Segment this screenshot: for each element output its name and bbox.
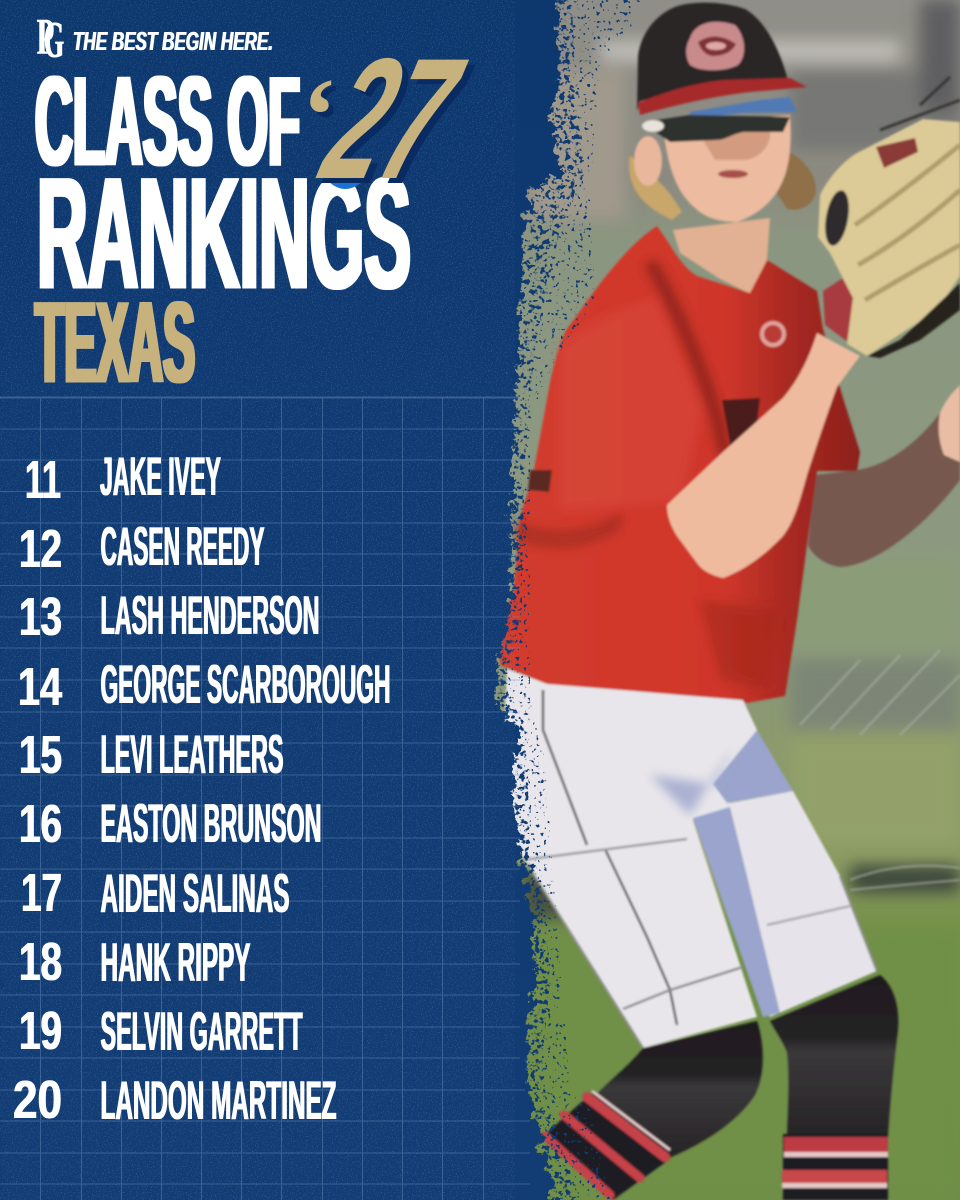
blueprint grid	[0, 397, 530, 1200]
infographic canvas: GEORGE SCARBOROUGH	[100, 653, 390, 715]
player pants right leg	[693, 791, 877, 1017]
ranking list: LASH HENDERSON	[100, 584, 320, 646]
dense speckled edge of blue panel	[0, 0, 585, 1200]
infographic canvas: RANKINGS	[37, 144, 411, 322]
year shadow: 27	[310, 29, 486, 220]
player face	[663, 115, 791, 222]
apostrophe shadow: ‘	[307, 61, 342, 178]
right striped sock	[782, 1134, 888, 1200]
rank 18: 18	[19, 932, 62, 992]
player cap crown	[637, 3, 788, 111]
rank 13: 13	[19, 587, 62, 647]
rank 19	[19, 1000, 302, 1062]
pants shadow	[650, 730, 793, 1017]
rank 18	[19, 931, 250, 993]
baseball glove	[818, 77, 960, 358]
rank 15	[19, 723, 284, 785]
player cap brim	[638, 78, 807, 115]
rank 20: 20	[13, 1070, 62, 1130]
player right hair	[775, 150, 816, 210]
rank 14: 14	[18, 657, 62, 717]
blue panel	[0, 0, 562, 1200]
logo: PG monogram: P	[37, 9, 54, 66]
ranking list: SELVIN GARRETT	[100, 1000, 302, 1062]
infographic canvas: TEXAS	[35, 279, 195, 407]
ranking list: LANDON MARTINEZ	[100, 1069, 336, 1131]
ranking list: CASEN REEDY	[100, 515, 264, 577]
rank 12	[19, 515, 264, 579]
player sunglasses	[642, 97, 797, 142]
year numerals: 27	[304, 24, 480, 215]
ranking list: EASTON BRUNSON	[100, 792, 322, 854]
ranking list: AIDEN SALINAS	[100, 862, 290, 924]
rank 17	[21, 862, 290, 924]
player pants left leg	[490, 669, 757, 1048]
rank 14	[18, 653, 390, 717]
rank 16	[19, 792, 322, 854]
infographic canvas: G	[44, 12, 64, 69]
rank 19: 19	[19, 1001, 62, 1061]
pants piping	[523, 690, 877, 1048]
apostrophe: ‘	[302, 56, 337, 173]
ranking list: JAKE IVEY	[100, 445, 221, 507]
glove wrist strap	[823, 278, 868, 345]
rank 17: 17	[21, 863, 62, 923]
infographic canvas: CLASS OF	[35, 50, 300, 192]
player belt	[672, 694, 745, 714]
photo: baseball player	[490, 3, 960, 1200]
rank 20	[13, 1069, 336, 1131]
player cap logo	[686, 22, 744, 70]
rank 11: 11	[25, 450, 61, 510]
player lips	[718, 170, 748, 178]
blue accent over G	[328, 181, 363, 189]
player far arm	[808, 413, 960, 567]
tagline: THE BEST BEGIN HERE.	[73, 26, 273, 56]
player nose shadow	[700, 130, 770, 160]
player far hand	[939, 385, 960, 462]
rank 11	[25, 445, 221, 510]
rank 12: 12	[19, 519, 62, 579]
player ear	[634, 136, 662, 186]
player jersey	[500, 226, 860, 703]
player forearm	[667, 333, 860, 578]
rank 15: 15	[19, 725, 62, 785]
ranking list	[13, 445, 390, 1131]
panel grain texture	[0, 0, 515, 1200]
right knee sleeve	[770, 975, 898, 1136]
player left hair	[629, 155, 682, 220]
left striped sock	[543, 1091, 670, 1200]
left knee sleeve	[597, 1021, 763, 1159]
ranking list: HANK RIPPY	[100, 931, 250, 993]
rank 16: 16	[19, 794, 62, 854]
rank 13	[19, 584, 320, 647]
sparse speckles past blue panel edge	[0, 0, 640, 1200]
ranking list: LEVI LEATHERS	[100, 723, 284, 785]
player neck	[673, 218, 770, 295]
class year	[302, 24, 486, 220]
photo: blurred ballfield background	[480, 0, 960, 1200]
